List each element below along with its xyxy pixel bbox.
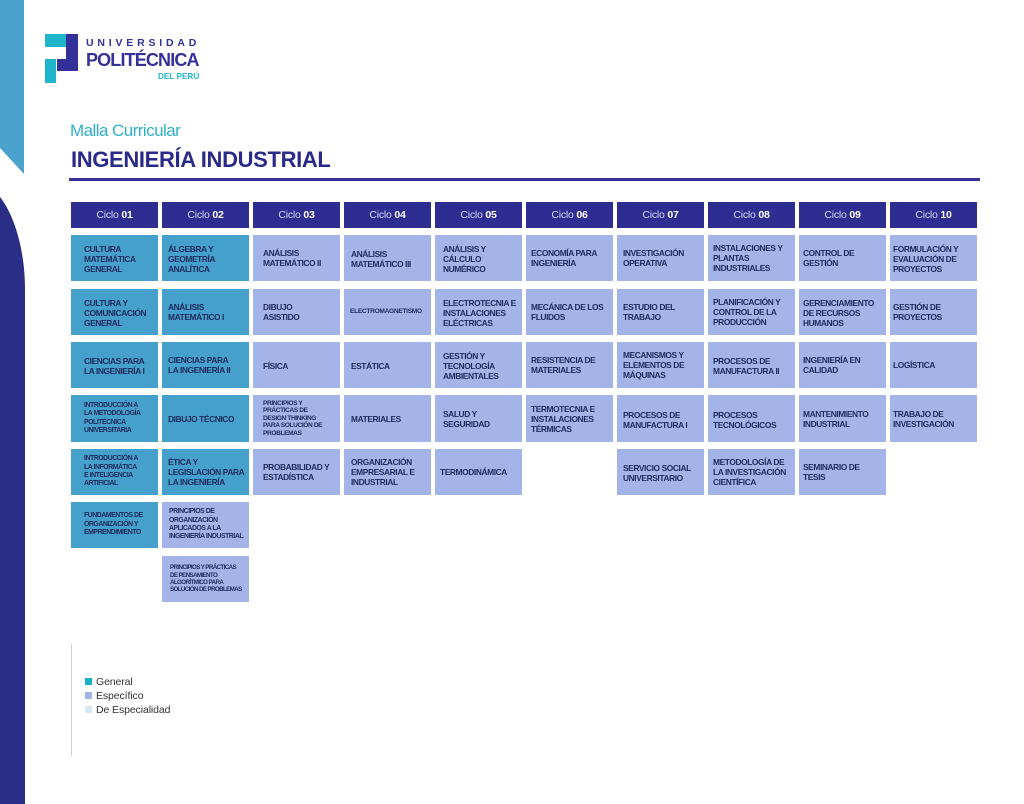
header: Ciclo 06: Ciclo 06 [551, 209, 588, 221]
course cell [708, 449, 795, 495]
course cell [162, 395, 249, 442]
header: Ciclo 07 [617, 202, 704, 228]
legend: De Especialidad [96, 704, 170, 716]
course cell: GENERAL [84, 318, 122, 328]
course cell: DIBUJO [263, 302, 292, 312]
course cell: TECNOLOGÍA [443, 361, 495, 371]
course cell [708, 342, 795, 388]
course cell: INVESTIGACIÓN [893, 418, 954, 428]
course cell [799, 395, 886, 442]
course cell: GESTIÓN [803, 258, 838, 268]
header: Ciclo 05 [435, 202, 522, 228]
course cell: COMUNICACIÓN [84, 308, 146, 318]
header: Ciclo 02: Ciclo 02 [187, 209, 224, 221]
course cell [708, 395, 795, 442]
course cell: UNIVERSITARIA [84, 427, 131, 434]
course cell: ANÁLISIS Y [443, 244, 486, 254]
course cell: INGENIERÍA INDUSTRIAL [169, 533, 243, 540]
course cell: EVALUACIÓN DE [893, 254, 957, 264]
course cell: PLANTAS [713, 253, 749, 263]
header: Ciclo 03: Ciclo 03 [278, 209, 315, 221]
course cell: MÁQUINAS [623, 370, 665, 380]
legend: General [96, 676, 133, 688]
course cell: APLICADOS A LA [169, 525, 221, 532]
course cell [253, 289, 340, 335]
course cell [71, 449, 158, 495]
course cell: CULTURA [84, 244, 121, 254]
course cell: FLUIDOS [531, 312, 565, 322]
course cell [162, 556, 249, 602]
course cell [344, 395, 431, 442]
course cell: PROYECTOS [893, 264, 942, 274]
course cell: DE PENSAMIENTO [170, 572, 217, 579]
course cell [253, 449, 340, 495]
course cell: LA INFORMÁTICA [84, 464, 137, 471]
course cell [344, 449, 431, 495]
course cell: PARA SOLUCIÓN DE [263, 422, 322, 429]
course cell: TÉRMICAS [531, 424, 572, 434]
course cell: PROBABILIDAD Y [263, 462, 329, 472]
course cell: TECNOLÓGICOS [713, 420, 776, 430]
course cell: ÉTICA Y [168, 457, 198, 467]
course cell: HUMANOS [803, 318, 843, 328]
course cell: MANUFACTURA I [623, 420, 687, 430]
course cell: E INTELIGENCIA [84, 472, 133, 479]
course cell: TERMOTECNIA E [531, 404, 595, 414]
course cell: NUMÉRICO [443, 264, 485, 274]
course cell: INVESTIGACIÓN [623, 248, 684, 258]
course cell: ELÉCTRICAS [443, 318, 493, 328]
course cell: ESTÁTICA [351, 361, 390, 371]
header: Ciclo 08: Ciclo 08 [733, 209, 770, 221]
course cell: LA INVESTIGACIÓN [713, 467, 786, 477]
header: Ciclo 01: Ciclo 01 [96, 209, 133, 221]
course cell [617, 289, 704, 335]
course cell: PROYECTOS [893, 312, 942, 322]
course cell [162, 289, 249, 335]
course cell: FORMULACIÓN Y [893, 244, 958, 254]
course cell: FÍSICA [263, 361, 288, 371]
course cell: MATEMÁTICO III [351, 259, 411, 269]
course cell: RESISTENCIA DE [531, 355, 595, 365]
course cell: GEOMETRÍA [168, 254, 215, 264]
course cell [435, 342, 522, 388]
course cell: CONTROL DE LA [713, 307, 777, 317]
course cell [799, 449, 886, 495]
course cell: MECANISMOS Y [623, 350, 684, 360]
course cell [71, 395, 158, 442]
course cell: MATEMÁTICO II [263, 258, 321, 268]
course cell: MANTENIMIENTO [803, 408, 868, 418]
course cell: TRABAJO DE [893, 408, 943, 418]
course cell: CIENCIAS PARA [168, 355, 228, 365]
subtitle: Malla Curricular: Malla Curricular [70, 121, 180, 140]
course cell: PRINCIPIOS Y PRÁCTICAS [170, 564, 236, 571]
course cell: INDUSTRIAL [351, 477, 398, 487]
course cell: ORGANIZACIÓN [351, 457, 412, 467]
course cell: AMBIENTALES [443, 371, 498, 381]
header: Ciclo 06 [526, 202, 613, 228]
course cell [526, 235, 613, 281]
course cell [435, 289, 522, 335]
course cell: CONTROL DE [803, 248, 854, 258]
course cell: LA INGENIERÍA I [84, 366, 144, 376]
course cell: ESTADÍSTICA [263, 472, 314, 482]
course cell: SOLUCIÓN DE PROBLEMAS [170, 586, 242, 593]
course cell: PLANIFICACIÓN Y [713, 297, 780, 307]
course cell: GERENCIAMIENTO [803, 298, 874, 308]
course cell [708, 289, 795, 335]
course cell: PROCESOS DE [623, 410, 680, 420]
course cell: INGENIERÍA EN [803, 355, 860, 365]
course cell [253, 395, 340, 442]
course cell: MANUFACTURA II [713, 366, 779, 376]
course cell: DESIGN THINKING [263, 415, 316, 422]
course cell: ORGANIZACIÓN Y [84, 521, 138, 528]
title: Ingeniería Industrial: INGENIERÍA INDUSTRIAL [71, 147, 331, 172]
course cell [617, 395, 704, 442]
course cell [253, 235, 340, 281]
course cell: OPERATIVA [623, 258, 667, 268]
course cell: ELEMENTOS DE [623, 360, 684, 370]
course cell: INTRODUCCIÓN A [84, 402, 138, 409]
course cell: PRÁCTICAS DE [263, 407, 308, 414]
course cell: GESTIÓN Y [443, 351, 485, 361]
course cell: TRABAJO [623, 312, 661, 322]
course cell: PROBLEMAS [263, 430, 302, 437]
course cell: MATERIALES [531, 365, 581, 375]
course cell [344, 289, 431, 335]
course cell: LEGISLACIÓN PARA [168, 467, 244, 477]
course cell: UNIVERSITARIO [623, 473, 683, 483]
course cell: LA INGENIERÍA II [168, 365, 230, 375]
course cell: ELECTROMAGNETISMO [350, 308, 422, 315]
course cell: PROCESOS [713, 410, 757, 420]
course cell: MATEMÁTICA [84, 254, 136, 264]
course cell: ANALÍTICA [168, 264, 210, 274]
course cell [890, 235, 977, 281]
course cell [344, 342, 431, 388]
course cell [162, 235, 249, 281]
course cell: EMPRENDIMIENTO [84, 529, 141, 536]
course cell [71, 342, 158, 388]
course cell [253, 342, 340, 388]
left decorative bar: light blue [0, 0, 25, 804]
course cell [435, 235, 522, 281]
legend: Específico [96, 690, 143, 702]
course cell: CIENTÍFICA [713, 477, 756, 487]
course cell: ASISTIDO [263, 312, 299, 322]
course cell [162, 502, 249, 548]
course cell: CÁLCULO [443, 254, 481, 264]
course cell: DIBUJO TÉCNICO [168, 414, 234, 424]
course cell: ANÁLISIS [351, 249, 387, 259]
course cell: POLITÉCNICA [84, 418, 126, 426]
course cell [71, 502, 158, 548]
course cell [617, 449, 704, 495]
course cell: METODOLOGÍA DE [713, 457, 784, 467]
course cell: MATEMÁTICO I [168, 312, 224, 322]
course cell: SEMINARIO DE [803, 462, 860, 472]
course cell: MATERIALES [351, 414, 401, 424]
course cell [890, 395, 977, 442]
course cell: INSTALACIONES [531, 414, 594, 424]
course cell: ECONOMÍA PARA [531, 248, 597, 258]
header: Ciclo 07: Ciclo 07 [642, 209, 679, 221]
course cell [435, 395, 522, 442]
logo: Universidad Politécnica del Perú: UNIVERSIDAD [86, 37, 200, 49]
course cell [617, 342, 704, 388]
course cell [344, 235, 431, 281]
course cell [526, 289, 613, 335]
course cell [617, 235, 704, 281]
header: Ciclo 08 [708, 202, 795, 228]
course cell: FUNDAMENTOS DE [84, 512, 143, 519]
course cell: ANÁLISIS [263, 248, 299, 258]
logo: Universidad Politécnica del Perú [45, 34, 200, 83]
course cell: LA INGENIERÍA [168, 477, 225, 487]
course cell [799, 289, 886, 335]
course cell: EMPRESARIAL E [351, 467, 415, 477]
course cell: INSTALACIONES Y [713, 243, 783, 253]
header: Ciclo 10 [890, 202, 977, 228]
logo: Universidad Politécnica del Perú: POLITÉCNICA [86, 50, 199, 70]
course cell: TERMODINÁMICA [440, 467, 507, 477]
header: Ciclo 09 [799, 202, 886, 228]
course cell [708, 235, 795, 281]
header: Ciclo 10: Ciclo 10 [915, 209, 952, 221]
course cell [526, 342, 613, 388]
header: Ciclo 04 [344, 202, 431, 228]
course cell: ÁLGEBRA Y [168, 244, 213, 254]
course cell [71, 289, 158, 335]
logo: Universidad Politécnica del Perú: DEL PERÚ [158, 72, 199, 81]
course cell [71, 235, 158, 281]
course cell: ELECTROTECNIA E [443, 298, 516, 308]
course cell: INTRODUCCIÓN A [84, 455, 138, 462]
header: Ciclo 05: Ciclo 05 [460, 209, 497, 221]
course cell: GENERAL [84, 264, 122, 274]
header: Ciclo 03 [253, 202, 340, 228]
course cell: DE RECURSOS [803, 308, 860, 318]
course cell: PRINCIPIOS Y [263, 400, 302, 407]
course cell: PROCESOS DE [713, 356, 770, 366]
course cell: PRODUCCIÓN [713, 317, 766, 327]
course cell [162, 342, 249, 388]
course cell: ALGORÍTMICO PARA [170, 579, 223, 586]
course cell: SALUD Y [443, 408, 477, 418]
course cell: SEGURIDAD [443, 418, 490, 428]
course cell [162, 449, 249, 495]
course cell: MECÁNICA DE LOS [531, 302, 603, 312]
course cell [526, 395, 613, 442]
header: Ciclo 09: Ciclo 09 [824, 209, 861, 221]
legend [85, 676, 170, 716]
course cell: ARTIFICIAL [84, 480, 118, 487]
header: Ciclo 04: Ciclo 04 [369, 209, 406, 221]
course cell: SERVICIO SOCIAL [623, 463, 691, 473]
course cell: INGENIERÍA [531, 258, 576, 268]
course cell [435, 449, 522, 495]
course cell: ORGANIZACIÓN [169, 517, 218, 524]
course cell: CIENCIAS PARA [84, 356, 144, 366]
course cell: ANÁLISIS [168, 302, 204, 312]
course cell [799, 235, 886, 281]
course cell: INDUSTRIALES [713, 263, 770, 273]
course cell [890, 289, 977, 335]
header: Ciclo 02 [162, 202, 249, 228]
course cell: LA METODOLOGÍA [84, 410, 140, 417]
course cell: CALIDAD [803, 365, 838, 375]
course cell [799, 342, 886, 388]
course cell: PRINCIPIOS DE [169, 508, 214, 515]
course cell: CULTURA Y [84, 298, 128, 308]
course cell: GESTIÓN DE [893, 302, 941, 312]
header: Ciclo 01 [71, 202, 158, 228]
course cell: ESTUDIO DEL [623, 302, 675, 312]
course cell [890, 342, 977, 388]
course cell: TESIS [803, 472, 825, 482]
course cell: INSTALACIONES [443, 308, 506, 318]
course cell: LOGÍSTICA [893, 360, 935, 370]
course cell: INDUSTRIAL [803, 418, 850, 428]
